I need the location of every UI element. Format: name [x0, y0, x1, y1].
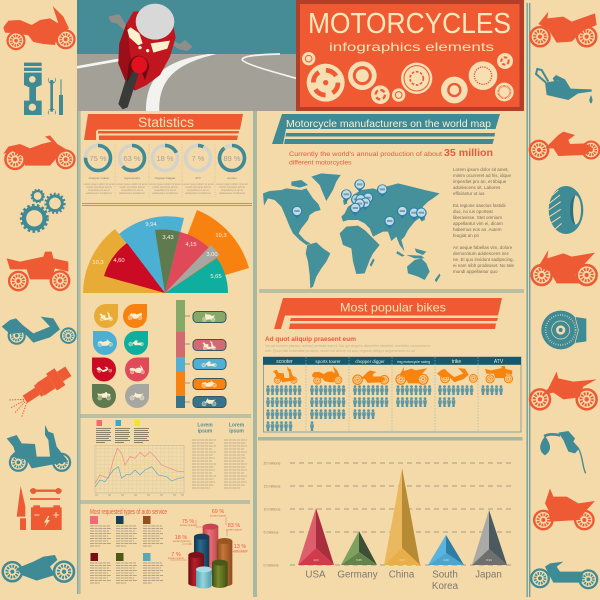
right mirror — [170, 40, 193, 51]
subheading: Ad quot aliquip praesent eum — [265, 336, 356, 343]
donut descriptions: minim ocurreret ad his — [185, 185, 212, 189]
icon: chopper — [530, 132, 599, 159]
pyramid: Germany: 5,65 — [356, 558, 362, 562]
pyramid: Germany — [341, 531, 377, 565]
country labels: Japan — [475, 570, 502, 580]
map description text: ne. Ei quo invidunt sadipscing, — [453, 257, 514, 262]
donut descriptions: minim ocurreret ad his — [219, 185, 246, 189]
left column icons — [2, 6, 76, 582]
cylinder percentage labels: Lorem ipsum — [168, 556, 185, 560]
pill: blue — [193, 358, 226, 370]
map description text: Ea regione sanctus fastidii — [453, 203, 506, 208]
donut: ATV 7%: 7 % — [192, 154, 205, 163]
pyramid: Japan: 9,94 — [486, 558, 492, 562]
country labels — [305, 570, 502, 592]
cylinder percentage labels: 69 % — [212, 509, 224, 515]
table: popular bikes: ring motorcycle racing — [397, 360, 430, 364]
donut: chopper cruiser 75% — [86, 146, 110, 170]
map description text: imperdiet pro an, et tibique — [453, 179, 507, 184]
cylinder percentage labels: Lorem ipsum — [173, 539, 190, 543]
donut: supersports 63%: 63 % — [123, 154, 141, 163]
icon: cruiser motorcycle — [3, 135, 74, 169]
icon: scooter — [7, 425, 70, 471]
donut descriptions: minim ocurreret ad his — [152, 185, 179, 189]
icon: tourer motorcycle — [3, 6, 74, 49]
callout: annual production — [289, 148, 493, 166]
y axis labels: 5 millions — [264, 530, 279, 534]
donut: chopper bagger 18% — [152, 146, 178, 170]
icon: gears — [21, 190, 65, 232]
map description text: liberavisse. Stet omnium — [453, 215, 502, 220]
pictogram counts — [266, 385, 504, 431]
hero image: motorcycle on road — [77, 0, 296, 111]
rose pie chart: 10,3 — [92, 260, 104, 266]
tire — [118, 63, 139, 109]
subtitle: infographics elements — [329, 40, 494, 54]
donut captions: scooter — [227, 176, 237, 180]
legend drop: yellow scooter — [94, 304, 118, 328]
pyramid: China: 19,3 — [399, 558, 405, 562]
rose pie chart: 3,43 — [162, 235, 174, 241]
donut: ATV 7% — [186, 146, 210, 170]
y axis labels: 15 millions — [264, 484, 281, 488]
mirrors — [108, 14, 129, 33]
cylinder percentage labels: Lorem ipsum — [232, 548, 249, 552]
icon: custom motorcycle — [3, 555, 74, 582]
y axis labels: 10 millions — [264, 508, 281, 512]
donut descriptions: minim ocurreret ad his — [119, 185, 146, 189]
service descriptions — [90, 526, 163, 583]
cylinder percentage labels: Lorem ipsum — [226, 528, 243, 532]
panel: most requested types of auto service — [90, 509, 167, 583]
pill: pink — [193, 340, 226, 350]
donut descriptions: imperdiet pro an et — [187, 188, 209, 192]
y axis labels: 20 millions — [264, 462, 281, 466]
donut descriptions: imperdiet pro an et — [221, 188, 243, 192]
donut descriptions: imperdiet pro an et — [154, 188, 176, 192]
cylinder percentage labels: 13 % — [234, 544, 246, 550]
icon: sport bike — [530, 12, 597, 46]
donut descriptions: Lorem ipsum dolor sit amet — [83, 182, 115, 186]
icon: piston and tools — [24, 63, 63, 115]
heading banner: Most popular bikes: Most popular bikes — [340, 300, 446, 314]
donut descriptions: Lorem ipsum dolor sit amet — [182, 182, 214, 186]
heading banner: Statistics — [84, 114, 243, 140]
title: MOTORCYCLES — [308, 8, 511, 40]
donut: scooter 89% — [220, 146, 244, 170]
map description text: democritum adolescens nec — [453, 251, 510, 256]
pyramid: Japan — [472, 510, 507, 565]
donut charts — [86, 146, 244, 170]
pill: green — [193, 312, 226, 322]
pyramid bar chart — [264, 462, 514, 592]
legend drop: orange sport — [123, 304, 147, 328]
intro text — [265, 344, 431, 353]
rose pie chart: 4,60 — [113, 258, 125, 264]
map description text: ei nam nibh prodesset. No tale — [453, 263, 515, 268]
cylinder percentage labels: 7 % — [171, 552, 181, 558]
donut captions: supersports — [124, 176, 140, 180]
heading banner: Most popular bikes — [274, 298, 502, 329]
icon: trike — [2, 317, 76, 344]
donut descriptions: adolescens sit labores — [86, 191, 113, 195]
icon: spark plug — [8, 363, 74, 417]
y axis labels — [264, 462, 281, 568]
heading banner: Statistics: Statistics — [138, 114, 194, 130]
rose pie chart: 19,3 — [215, 233, 227, 239]
callout: annual production: Currently the world's annual production of about — [289, 151, 442, 158]
country labels: China — [389, 570, 415, 580]
colour key squares — [90, 516, 150, 561]
donut descriptions: Lorem ipsum dolor sit amet — [216, 182, 248, 186]
donut descriptions: Lorem ipsum dolor sit amet — [116, 182, 148, 186]
country labels: Germany — [337, 570, 378, 580]
chart axis labels — [95, 494, 184, 496]
table: popular bikes: scooter — [276, 359, 293, 365]
donut captions: chopper bagger — [154, 176, 176, 180]
text columns: Lorem ipsum — [192, 422, 247, 488]
rose pie chart: 5,65 — [210, 274, 222, 280]
panel: statistics — [83, 114, 248, 197]
map description text: Lorem ipsum dolor sit amet, — [453, 167, 509, 172]
icon: brake disc — [541, 311, 587, 349]
table: popular bikes: ATV — [494, 359, 504, 365]
donut descriptions: imperdiet pro an et — [88, 188, 110, 192]
legend drop: gray dirt bike — [125, 384, 149, 408]
callout: annual production: 35 million — [444, 148, 493, 159]
map description text: habemus eos an. Autem — [453, 227, 502, 232]
donut descriptions: minim ocurreret ad his — [86, 185, 113, 189]
map description text: minim ocurreret ad his, idque — [453, 173, 512, 178]
pyramid: USA — [298, 508, 334, 565]
panel: most popular bikes — [263, 298, 521, 432]
table: popular bikes: trike — [452, 359, 461, 365]
right column icons — [530, 12, 599, 588]
donut descriptions: adolescens sit labores — [119, 191, 146, 195]
map description text: mundi appellantur quo — [453, 269, 498, 274]
legend drop: red tourer — [125, 358, 149, 382]
map description text — [453, 167, 515, 274]
country labels: Korea — [432, 581, 459, 592]
rose pie chart: 9,94 — [145, 222, 157, 228]
table: popular bikes: sports tourer — [315, 359, 341, 364]
callout: annual production: different motorcycles — [289, 160, 352, 166]
table: popular bikes — [263, 357, 521, 432]
orange bike icons — [273, 366, 513, 384]
map description text: feugiat an pri — [453, 233, 479, 238]
icon: oil can — [536, 69, 593, 104]
intro text: mel. Quod bibi molestiae cu atom, unum mil dolore ea sea, regione oblique argumentum ex sit — [265, 349, 415, 353]
icon: racing motorcycle — [532, 250, 597, 285]
donut descriptions — [83, 182, 248, 195]
windscreen — [136, 4, 174, 40]
donut descriptions: imperdiet pro an et — [121, 188, 143, 192]
text columns: Lorem ipsum: Lorem — [229, 422, 245, 428]
icon: jump clamp, tools and battery — [17, 486, 62, 530]
icon: street bike — [534, 488, 595, 529]
icon: fuel nozzle — [540, 431, 586, 473]
donut: supersports 63% — [120, 146, 144, 170]
map description text: duo, no ius oporteat — [453, 209, 494, 214]
map description text: efficiantur ut ius — [453, 191, 485, 196]
donut: chopper cruiser 75%: 75 % — [89, 154, 107, 163]
icon: custom chopper — [531, 562, 597, 588]
icon: dirt bike — [530, 372, 597, 409]
map description text: adolescens sit. Labores — [453, 185, 501, 190]
table: popular bikes: chopper digger — [355, 359, 385, 364]
line chart — [95, 420, 184, 495]
country labels: South — [432, 570, 458, 580]
intro text: Vis ad summo planius, animal pertinax eau id. No qui singulis dissentiet disseriet, everttitur voluptaria ex — [265, 344, 431, 348]
chart legend — [96, 420, 149, 442]
title panel — [296, 0, 524, 111]
donut: chopper bagger 18%: 18 % — [156, 154, 174, 163]
pyramid: South Korea — [428, 535, 464, 565]
map description text: appellantur vim ei, dicam — [453, 221, 503, 226]
chart lines — [95, 448, 184, 487]
pill: dark teal — [193, 396, 226, 408]
pill: orange — [193, 378, 226, 390]
donut captions: ATV — [195, 176, 201, 180]
heading: Most requested types of auto service — [90, 509, 167, 516]
chart grid — [95, 446, 184, 493]
fairing — [118, 10, 176, 91]
text columns: Lorem ipsum: ipsum — [229, 428, 244, 434]
y axis labels: 0 millions — [264, 564, 279, 568]
donut captions — [89, 176, 237, 180]
donut: scooter 89%: 89 % — [223, 154, 241, 163]
drop-shaped motorcycle legend — [92, 304, 149, 408]
pyramid: China — [384, 468, 420, 565]
donut descriptions: adolescens sit labores — [219, 191, 246, 195]
text columns: Lorem ipsum: Lorem — [197, 422, 213, 428]
text columns: Lorem ipsum: ipsum — [198, 428, 213, 434]
pyramid: South Korea: 4,60 — [443, 558, 449, 562]
rose pie chart: 4,15 — [185, 242, 197, 248]
cylinder percentage labels: 83 % — [228, 523, 240, 529]
world map with pins — [263, 173, 440, 288]
donut descriptions: adolescens sit labores — [185, 191, 212, 195]
icon: tire — [549, 186, 583, 234]
legend drop: olive ATV — [92, 384, 116, 408]
pyramid: USA: 10,3 — [313, 558, 319, 562]
map description text: An aeque fabellas vim, dolore — [453, 245, 513, 250]
country labels: USA — [305, 570, 326, 580]
stacked bar with pill labels — [176, 300, 226, 408]
cylinder percentage labels: 75 % — [182, 519, 194, 525]
3D cylinder chart — [188, 524, 232, 589]
legend drop: blue cruiser — [93, 331, 117, 355]
legend drop: crimson trike — [92, 358, 116, 382]
donut descriptions: Lorem ipsum dolor sit amet — [149, 182, 181, 186]
cylinder percentage labels: Lorem ipsum — [210, 514, 227, 518]
brake discs and wheels illustration — [302, 52, 514, 104]
heading banner: manufacturers: Motorcycle manufacturers on the world map — [286, 118, 491, 130]
rose pie chart: 3,00 — [206, 252, 218, 258]
donut descriptions: adolescens sit labores — [152, 191, 179, 195]
legend drop: teal chopper — [124, 331, 148, 355]
cylinder percentage labels — [168, 509, 249, 560]
rose pie chart — [83, 210, 249, 293]
heading banner: manufacturers — [272, 114, 500, 144]
icon: ATV — [7, 252, 69, 290]
panel: world map — [263, 114, 515, 288]
cylinder percentage labels: Lorem ipsum — [180, 523, 197, 527]
donut captions: chopper cruiser — [89, 176, 109, 180]
cylinder percentage labels: 18 % — [175, 535, 187, 541]
